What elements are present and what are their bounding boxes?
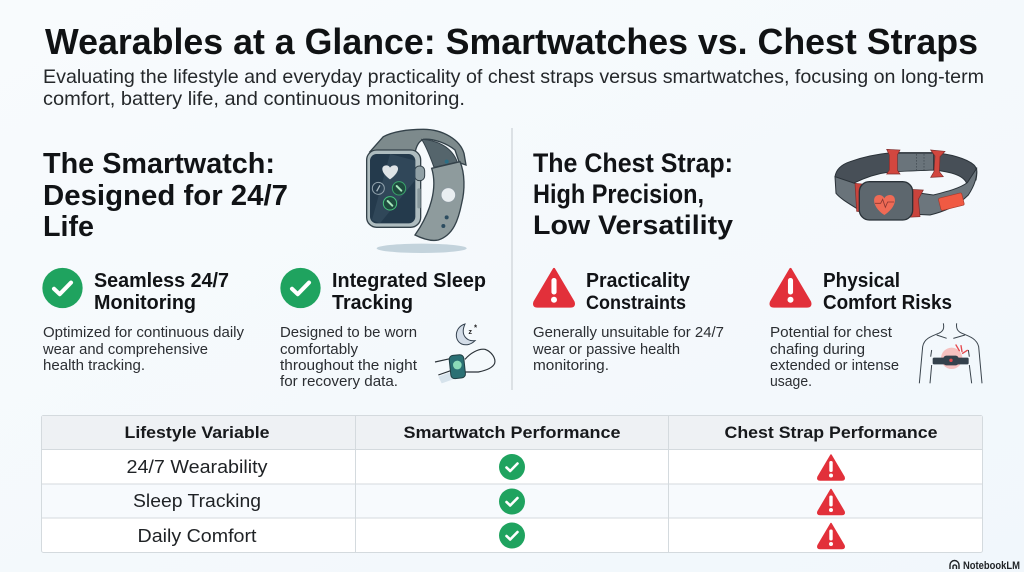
feature text: extended or intense: [770, 358, 899, 374]
subtitle: Evaluating the lifestyle and everyday practicality of chest straps versus smartwatches, focusing on long-term: [43, 66, 984, 88]
row: sleep tracking: Sleep Tracking: [133, 491, 261, 511]
feature text: health tracking.: [43, 358, 145, 374]
feature text: for recovery data.: [280, 374, 398, 390]
feature heading: [94, 270, 229, 314]
feature text: wear or passive health: [532, 342, 680, 358]
feature heading: Practicality: [586, 270, 691, 292]
icon: wrist with moon: z: [468, 327, 472, 336]
feature text: [280, 325, 417, 390]
subtitle: [43, 66, 984, 110]
smartwatch heading: [43, 148, 288, 243]
feature text: chafing during: [770, 342, 865, 358]
table header: Smartwatch Performance: [404, 423, 620, 442]
icon: wrist with moon: [435, 324, 495, 383]
feature text: [532, 325, 724, 374]
row: sleep tracking: [133, 488, 844, 514]
feature heading: [586, 270, 691, 314]
icon: red warning: [534, 269, 574, 306]
chest strap heading: [533, 148, 733, 240]
feature text: Designed to be worn: [280, 325, 417, 341]
feature heading: Integrated Sleep: [332, 270, 486, 292]
feature text: usage.: [770, 374, 812, 390]
table header: [124, 423, 938, 442]
feature text: Generally unsuitable for 24/7: [533, 325, 724, 341]
feature heading: Monitoring: [94, 292, 196, 314]
chest strap heading: High Precision,: [533, 179, 704, 209]
icon: green check: [280, 268, 321, 308]
feature text: wear and comprehensive: [42, 342, 208, 358]
feature heading: Constraints: [586, 293, 686, 314]
feature text: Potential for chest: [770, 325, 892, 341]
feature heading: Physical: [823, 270, 900, 292]
smartwatch heading: The Smartwatch:: [43, 148, 275, 180]
feature heading: Tracking: [332, 292, 413, 314]
chest strap heading: The Chest Strap:: [533, 148, 733, 178]
feature text: [770, 325, 899, 390]
icon: green check: [42, 268, 83, 308]
smartwatch heading: Life: [43, 211, 94, 243]
feature: comfort risks: [770, 269, 982, 390]
table header: Lifestyle Variable: [124, 423, 270, 442]
panel: chest strap: [532, 148, 982, 390]
row: daily comfort: Daily Comfort: [138, 526, 256, 546]
icon: wrist with moon: *: [474, 324, 478, 333]
title: Wearables at a Glance: Smartwatches vs. Chest Straps: [45, 21, 978, 62]
icon: smartwatch illustration: [367, 129, 467, 253]
feature: practicality constraints: [532, 269, 724, 374]
row: 24/7 wearability: 24/7 Wearability: [126, 457, 268, 477]
row: daily comfort: [138, 522, 844, 548]
icon: chest strap illustration: [835, 149, 977, 220]
comparison table: [42, 416, 982, 552]
icon: red warning: [771, 269, 810, 306]
feature heading: Comfort Risks: [823, 292, 952, 314]
feature: seamless monitoring: [42, 268, 245, 374]
subtitle: comfort, battery life, and continuous monitoring.: [43, 88, 465, 110]
feature: sleep tracking: [280, 268, 495, 390]
feature text: throughout the night: [280, 358, 417, 374]
feature text: Optimized for continuous daily: [43, 325, 245, 341]
feature text: monitoring.: [533, 358, 609, 374]
feature heading: [823, 270, 952, 314]
table header: Chest Strap Performance: [724, 423, 938, 442]
feature text: [42, 325, 245, 374]
divider: [512, 128, 513, 390]
icon: torso with strap: [919, 323, 982, 383]
feature heading: Seamless 24/7: [94, 270, 229, 292]
feature text: comfortably: [280, 342, 359, 358]
smartwatch heading: Designed for 24/7: [43, 180, 288, 212]
panel: smartwatch: [42, 129, 495, 390]
chest strap heading: Low Versatility: [533, 210, 733, 240]
feature heading: [332, 270, 486, 314]
row: 24/7 wearability: [126, 454, 844, 480]
